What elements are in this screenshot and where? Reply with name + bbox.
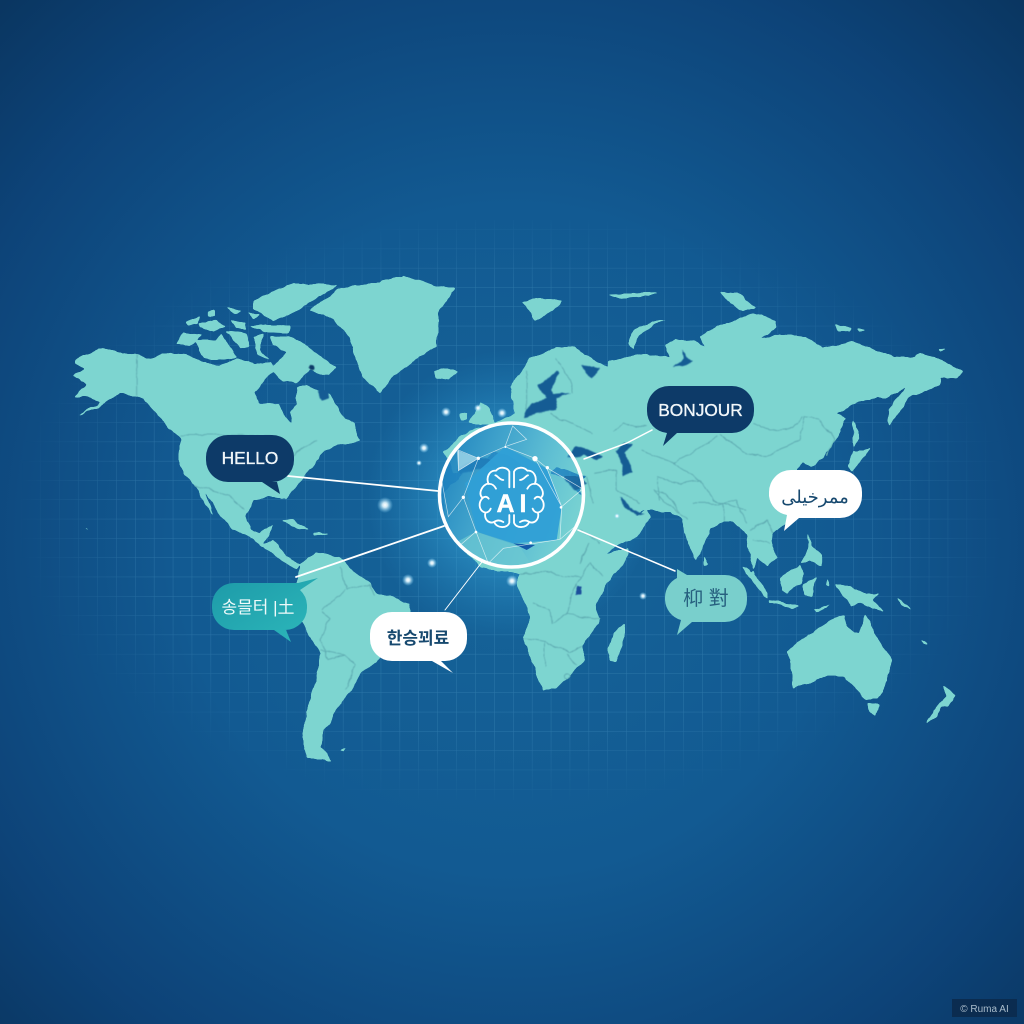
North America and Greenland [73,275,458,568]
Africa and Asia border lines [520,490,773,679]
sparkles [377,404,647,600]
line: BONJOUR [584,430,652,459]
map grid [50,236,974,784]
speech bubble: right teal-green [665,569,747,635]
North America borders [137,355,317,508]
line: Korean bubble [445,562,482,610]
speech bubble: Arabic: ممرخيلى [781,487,849,508]
speech bubble: Arabic [769,470,862,531]
speech bubble: BONJOUR: BONJOUR [658,400,743,420]
speech bubble: HELLO [206,435,294,494]
land tint at lower left of hub [458,532,521,565]
hub ring [440,423,584,567]
world map [73,275,963,760]
Africa, Madagascar, Australasia and SE Asia [443,467,957,723]
speech bubble: right teal-green: 枊 對 [683,587,729,610]
speech bubble: HELLO: HELLO [222,448,278,468]
copyright badge: © Ruma AI [960,1004,1009,1015]
speech bubble: teal Korean-like [212,578,318,642]
line: right bubble [578,530,675,571]
hub interior overlay [440,423,584,573]
line: HELLO [288,476,438,491]
connector lines [288,430,675,610]
copyright badge [952,999,1017,1017]
inland seas [457,350,693,515]
AI hub circle [440,423,584,573]
line: teal bubble [296,526,444,577]
Eurasia [443,292,963,590]
South America [293,552,412,760]
Lake Victoria [576,587,581,595]
Eurasia borders [527,358,833,520]
speech bubble: white Korean [370,612,467,673]
speech bubble: BONJOUR [647,386,754,446]
speech bubble: teal Korean-like: 송믈터 |土 [221,598,295,617]
AI label: AI [496,490,532,518]
brain icon [480,468,544,527]
speech bubble: white Korean: 한승꾀료 [387,629,449,648]
network polygon [465,447,562,543]
central glow [366,350,656,640]
